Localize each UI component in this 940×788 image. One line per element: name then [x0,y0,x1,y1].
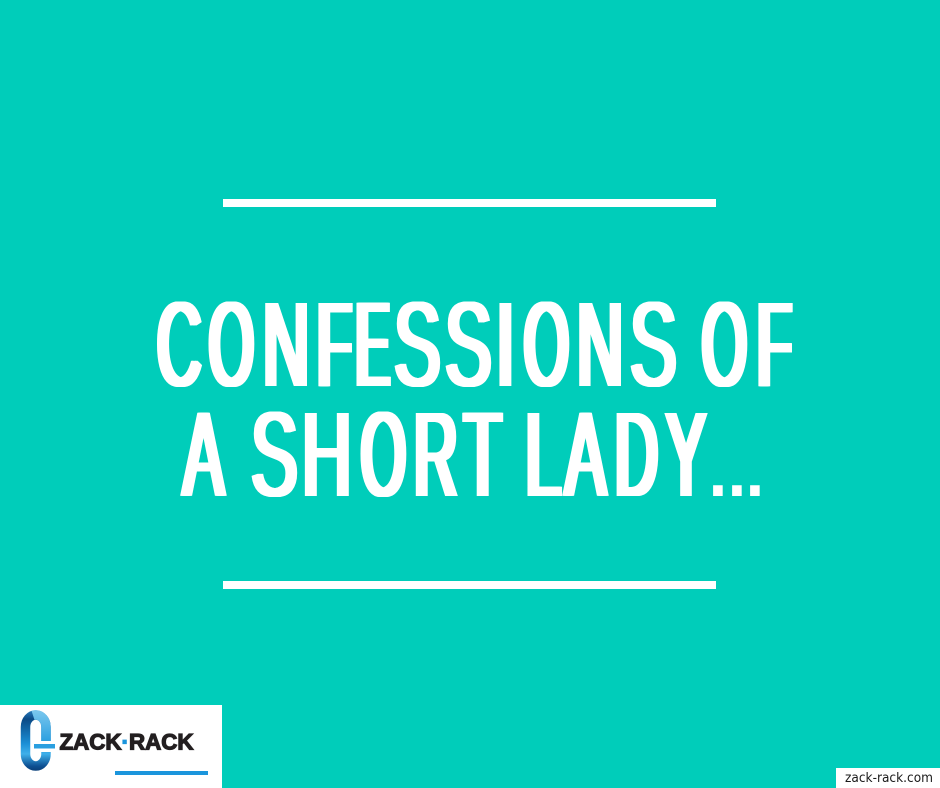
title: I [496,276,513,412]
title: A [183,386,224,522]
title: L [525,386,561,522]
icon: zack-rack link [26,715,55,766]
title: D [615,386,657,522]
logo underline [115,771,208,775]
title: T [464,386,501,522]
title: S [630,276,676,412]
website label: zack-rack.com [845,771,933,786]
title: O [360,386,405,522]
title: C [157,276,201,412]
title: F [757,276,791,412]
title: H [302,386,352,522]
title: . [704,406,732,518]
title: R [414,386,458,522]
title: N [577,276,623,412]
title: . [723,406,751,518]
title: A [565,386,606,522]
title: S [250,386,297,522]
top rule [223,199,716,207]
title: O [702,276,746,412]
title: S [444,276,491,412]
title: O [208,276,253,412]
website label [836,768,940,788]
title: S [394,276,440,412]
bottom rule [223,581,716,589]
logo wordmark: ZACK·RACK [60,730,194,754]
title [157,276,793,522]
title: . [741,406,769,518]
title: E [356,276,389,412]
title: Y [666,386,706,522]
logo panel [0,705,222,788]
title: F [317,276,351,412]
title: N [263,276,309,412]
title: O [524,276,568,412]
